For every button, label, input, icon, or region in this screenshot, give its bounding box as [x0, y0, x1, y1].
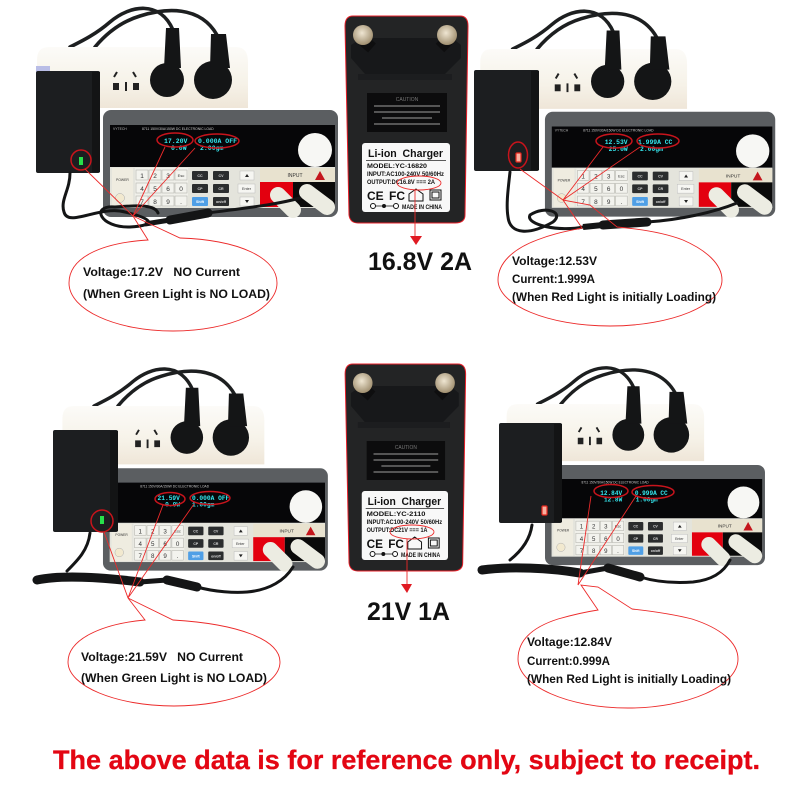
charger rating label: MADE IN CHINA	[402, 204, 442, 211]
load display readings: 12.53V	[605, 139, 628, 146]
charger rating label	[362, 491, 448, 560]
load display readings: 17.20V	[164, 138, 188, 145]
load display readings: 0.000A OFF	[192, 495, 230, 502]
charger rating label: OUTPUT:DC16.8V === 2A	[367, 179, 435, 186]
load display readings: 0.000A OFF	[198, 138, 237, 145]
electronic load instrument: 3	[604, 524, 608, 531]
electronic load instrument: 9	[166, 199, 170, 206]
electronic load instrument: 3	[607, 173, 611, 180]
electronic load instrument: CC	[193, 529, 199, 533]
charger rating label: CE	[367, 189, 384, 203]
load display readings: 0.0W	[171, 145, 187, 152]
electronic load instrument: 8711 150V/30A/150W DC ELECTRONIC LOAD	[142, 127, 214, 131]
load display readings: 12.8W	[604, 496, 623, 503]
electronic load instrument: Shift	[196, 200, 205, 204]
charger rating label: Li-ion Charger	[368, 148, 444, 160]
charger rating label: MADE IN CHINA	[401, 552, 440, 559]
electronic load instrument: 1	[580, 524, 584, 531]
red highlight circles	[508, 134, 679, 200]
charger plug face	[351, 25, 461, 80]
panel: 16.8V 2A charger photo	[345, 16, 472, 276]
charger plug face	[351, 373, 459, 428]
electronic load instrument: 8711 150V/30A/150W DC ELECTRONIC LOAD	[140, 484, 210, 488]
callout bubble: (When Green Light is NO LOAD)	[81, 673, 267, 685]
electronic load instrument: CP	[638, 187, 643, 191]
electronic load instrument: on/off	[216, 200, 227, 204]
load display readings: 1.00gm	[192, 502, 215, 509]
panel: 16.8V adapter no load test	[36, 8, 338, 331]
electronic load instrument	[545, 465, 765, 565]
load display readings: 2.00gm	[640, 146, 663, 153]
electronic load instrument: Shift	[636, 200, 645, 204]
charger rating label	[362, 143, 450, 212]
electronic load instrument: INPUT	[726, 173, 740, 179]
charger rating label: MODEL:YC-2110	[367, 511, 426, 518]
charger rating label: INPUT:AC100-240V 50/60Hz	[367, 519, 442, 526]
electronic load instrument	[103, 468, 328, 571]
electronic load instrument: Esc	[618, 173, 625, 178]
electronic load instrument: .	[180, 199, 182, 206]
charger rating label: FC	[389, 189, 405, 203]
electronic load instrument: CP	[193, 542, 199, 546]
charger rating label: Li-ion Charger	[368, 496, 442, 508]
electronic load instrument: 6	[166, 186, 170, 193]
charger body	[345, 364, 466, 571]
electronic load instrument: Shift	[632, 549, 640, 553]
load display readings: 12.84V	[600, 490, 622, 497]
callout bubble: (When Red Light is initially Loading)	[512, 292, 716, 304]
power adapter with green LED	[36, 71, 100, 173]
electronic load instrument: 1	[581, 173, 585, 180]
red highlight circles	[71, 133, 239, 216]
electronic load instrument: .	[177, 553, 179, 560]
electronic load instrument: 0	[179, 186, 183, 193]
load display readings	[600, 490, 668, 503]
power strip with plugs	[507, 368, 704, 461]
electronic load instrument: 1	[139, 528, 143, 535]
panel: 21V adapter no load test	[37, 369, 328, 706]
panel: 21V 1A charger photo	[345, 364, 466, 626]
load display readings: 1.00gm	[636, 496, 658, 503]
power strip with plugs	[62, 369, 264, 464]
electronic load instrument: 1	[140, 173, 144, 180]
callout bubble: Voltage:12.84V	[527, 637, 612, 649]
callout bubble: Current:0.999A	[527, 656, 610, 668]
electronic load instrument: CV	[653, 525, 659, 529]
electronic load instrument: CR	[653, 537, 658, 541]
electronic load instrument: 5	[594, 186, 598, 193]
electronic load instrument: on/off	[651, 549, 661, 553]
caution plate: CAUTION	[396, 97, 419, 103]
load display readings: 21.59V	[158, 495, 180, 502]
callout bubble: (When Green Light is NO LOAD)	[83, 289, 270, 301]
electronic load instrument: CV	[218, 174, 224, 178]
load display readings	[605, 139, 673, 153]
caution plate	[367, 93, 447, 132]
electronic load instrument: 8711 150V/30A/150W DC ELECTRONIC LOAD	[583, 128, 654, 132]
load display readings: 1.999A CC	[638, 139, 673, 146]
electronic load instrument: 3	[166, 173, 170, 180]
load display readings: 25.0W	[609, 146, 628, 153]
electronic load instrument: 5	[151, 541, 155, 548]
output cable	[507, 172, 737, 231]
electronic load instrument: Enter	[681, 187, 691, 191]
charger rating label: MODEL:YC-16820	[367, 163, 427, 170]
electronic load instrument: 2	[153, 173, 157, 180]
electronic load instrument: 2	[594, 173, 598, 180]
electronic load instrument: 4	[139, 541, 143, 548]
electronic load instrument: CR	[658, 187, 664, 191]
output cable	[482, 525, 730, 582]
power strip with plugs	[36, 8, 248, 108]
electronic load instrument: on/off	[656, 200, 666, 204]
electronic load instrument: 6	[163, 541, 167, 548]
red highlight circles	[578, 484, 674, 585]
electronic load instrument: .	[620, 199, 622, 206]
charger body	[345, 16, 468, 223]
electronic load instrument: 7	[139, 553, 143, 560]
electronic load instrument: INPUT	[288, 173, 302, 179]
electronic load instrument: CC	[197, 174, 203, 178]
electronic load instrument: 9	[607, 199, 611, 206]
electronic load instrument: Esc	[174, 529, 181, 533]
power strip with plugs	[480, 11, 687, 109]
power adapter with red LED	[499, 423, 562, 523]
electronic load instrument: 8711 150V/30A/150W DC ELECTRONIC LOAD	[582, 481, 649, 485]
electronic load instrument: 5	[592, 536, 596, 543]
output highlight and arrow	[397, 176, 441, 245]
charger rating label: INPUT:AC100-240V 50/60Hz	[367, 171, 445, 178]
power adapter with green LED	[53, 430, 118, 532]
electronic load instrument: 4	[581, 186, 585, 193]
electronic load instrument: 8	[594, 199, 598, 206]
electronic load instrument: VYTECH	[113, 127, 127, 131]
electronic load instrument: 4	[140, 186, 144, 193]
electronic load instrument: CP	[198, 187, 203, 191]
electronic load instrument: Enter	[236, 542, 245, 546]
electronic load instrument: POWER	[115, 533, 128, 537]
output highlight and arrow	[390, 525, 434, 593]
power adapter with red LED	[474, 70, 539, 171]
charger rating heading: 16.8V 2A	[368, 248, 472, 276]
electronic load instrument: 8	[592, 548, 596, 555]
electronic load instrument: 9	[163, 553, 167, 560]
electronic load instrument: Enter	[242, 187, 252, 191]
callout bubble	[498, 200, 722, 326]
electronic load instrument: Esc	[615, 525, 621, 529]
electronic load instrument: Esc	[178, 173, 184, 178]
electronic load instrument: POWER	[558, 178, 571, 182]
electronic load instrument: 2	[592, 524, 596, 531]
charger rating label: CE	[367, 537, 383, 551]
electronic load instrument: 7	[140, 199, 144, 206]
electronic load instrument: INPUT	[718, 524, 732, 529]
electronic load instrument: CR	[218, 187, 224, 191]
electronic load instrument: 8	[153, 199, 157, 206]
charger rating heading: 21V 1A	[367, 598, 450, 626]
output cable	[37, 533, 293, 592]
caution plate: CAUTION	[395, 445, 417, 451]
electronic load instrument: on/off	[211, 554, 222, 558]
electronic load instrument: INPUT	[280, 528, 294, 534]
electronic load instrument: CV	[658, 174, 664, 178]
electronic load instrument: 3	[163, 528, 167, 535]
disclaimer: The above data is for reference only, subject to receipt.	[53, 745, 760, 775]
electronic load instrument: POWER	[557, 528, 570, 532]
electronic load instrument: CC	[637, 174, 643, 178]
callout bubble: Voltage:17.2V NO Current	[83, 267, 240, 279]
load display readings: 0.999A CC	[635, 490, 668, 497]
load display readings	[158, 495, 230, 509]
electronic load instrument: 8	[151, 553, 155, 560]
electronic load instrument: CC	[633, 525, 639, 529]
electronic load instrument: CV	[214, 529, 219, 533]
callout bubble	[518, 585, 738, 708]
electronic load instrument: 0	[616, 536, 620, 543]
electronic load instrument	[545, 112, 775, 217]
callout bubble: (When Red Light is initially Loading)	[527, 674, 731, 686]
load display readings	[164, 138, 237, 152]
electronic load instrument: 7	[581, 199, 585, 206]
charger rating label: OUTPUT:DC21V === 1A	[367, 527, 428, 534]
electronic load instrument: 2	[151, 528, 155, 535]
electronic load instrument: VYTECH	[555, 128, 569, 132]
electronic load instrument: 0	[176, 541, 180, 548]
electronic load instrument: CR	[213, 542, 219, 546]
callout bubble: Voltage:12.53V	[512, 256, 597, 268]
electronic load instrument: 0	[620, 186, 624, 193]
panel: 21V adapter loaded test	[482, 368, 765, 708]
output cable	[63, 173, 300, 227]
callout bubble	[69, 216, 277, 331]
load display readings: 0.0W	[165, 502, 180, 509]
electronic load instrument: 7	[580, 548, 584, 555]
red highlight circles	[91, 492, 230, 598]
load display readings: 2.00gm	[200, 145, 224, 152]
caution plate	[367, 441, 445, 480]
callout bubble	[68, 598, 280, 706]
electronic load instrument: Enter	[675, 537, 684, 541]
callout bubble: Voltage:21.59V NO Current	[81, 652, 243, 664]
electronic load instrument: 4	[580, 536, 584, 543]
electronic load instrument: Shift	[192, 554, 200, 558]
electronic load instrument: POWER	[116, 178, 129, 182]
electronic load instrument: .	[617, 548, 619, 555]
callout bubble: Current:1.999A	[512, 274, 595, 286]
electronic load instrument: 9	[604, 548, 608, 555]
electronic load instrument: 6	[607, 186, 611, 193]
electronic load instrument: CP	[633, 537, 639, 541]
panel: 16.8V adapter loaded test	[474, 11, 775, 326]
electronic load instrument: 5	[153, 186, 157, 193]
electronic load instrument	[103, 110, 338, 217]
electronic load instrument: 6	[604, 536, 608, 543]
charger rating label: FC	[388, 537, 404, 551]
